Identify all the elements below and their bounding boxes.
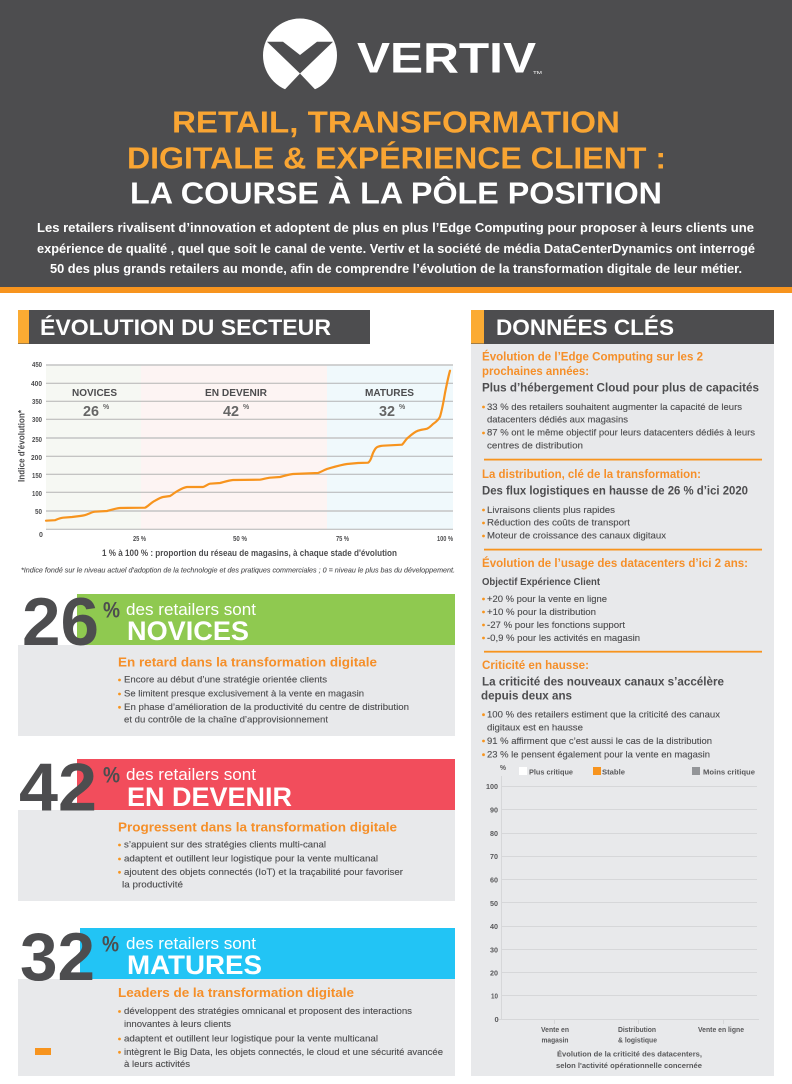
bullet list	[118, 675, 409, 724]
y axis labels: 90	[490, 806, 498, 814]
intro text: expérience de qualité , quel que soit le canal de vente. Vertiv et la société de média DataCenterDynamics ont interrogé	[37, 241, 755, 256]
bullet list	[118, 840, 403, 889]
block: usage des datacenters	[482, 555, 748, 643]
y axis labels: 70	[490, 852, 498, 861]
heading: données clés: DONNÉES CLÉS	[496, 315, 674, 340]
stage label: novices	[72, 387, 117, 420]
y axis labels: 0	[494, 1015, 499, 1024]
x axis labels: 50 %	[233, 536, 248, 543]
block: edge computing: prochaines années:	[482, 364, 589, 378]
x axis labels: 75 %	[336, 536, 350, 543]
block: criticité	[481, 658, 724, 760]
band text: des retailers sont	[126, 600, 256, 619]
block: criticité: 23 % le pensent également pour la vente en magasin	[487, 750, 710, 760]
x axis labels: & logistique	[618, 1036, 657, 1045]
band text	[126, 934, 262, 980]
y axis labels: 50	[35, 509, 42, 516]
y axis labels: 150	[32, 473, 42, 480]
block: edge computing: 33 % des retailers souhaitent augmenter la capacité de leurs	[487, 402, 742, 412]
bullet list: En phase d’amélioration de la productivité du centre de distribution	[124, 702, 409, 712]
block: distribution: Des flux logistiques en hausse de 26 % d’ici 2020	[482, 484, 748, 498]
block: usage des datacenters: +10 % pour la distribution	[487, 607, 596, 617]
block: criticité: Criticité en hausse:	[482, 658, 589, 672]
line chart: indice d'évolution	[16, 362, 454, 559]
panel: 42 % en devenir	[18, 750, 455, 901]
band text	[126, 600, 256, 646]
chart caption	[556, 1050, 702, 1070]
percent sign: %	[103, 763, 120, 788]
evolution curve	[46, 371, 450, 521]
y axis labels: 80	[490, 829, 498, 838]
block: distribution: Moteur de croissance des canaux digitaux	[487, 531, 666, 541]
block: criticité: 100 % des retailers estiment que la criticité des canaux	[487, 710, 720, 720]
x axis labels: Distribution	[618, 1025, 656, 1034]
x axis labels	[133, 536, 454, 543]
band text: EN DEVENIR	[127, 782, 292, 812]
title: LA COURSE À LA PÔLE POSITION	[130, 174, 662, 210]
y axis title: Indice d'évolution*	[16, 410, 26, 482]
legend: %	[500, 763, 506, 772]
bullet list: adaptent et outillent leur logistique pour la vente multicanal	[124, 1034, 378, 1044]
intro text: 50 des plus grands retailers au monde, afin de comprendre l’évolution de la transformation digitale de leur métier.	[50, 261, 742, 276]
bullet list: ajoutent des objets connectés (IoT) et la traçabilité pour favoriser	[124, 867, 403, 877]
panel: 32 % matures	[18, 919, 455, 1076]
stage label: matures	[365, 387, 414, 420]
block: edge computing: Plus d’hébergement Cloud pour plus de capacités	[482, 381, 759, 395]
block: edge computing: datacenters dédiés aux magasins	[487, 415, 628, 425]
bullet list: intègrent le Big Data, les objets connectés, le cloud et une sécurité avancée	[124, 1047, 443, 1057]
x axis caption: 1 % à 100 % : proportion du réseau de magasins, à chaque stade d'évolution	[102, 548, 397, 559]
title: RETAIL, TRANSFORMATION	[172, 106, 620, 140]
block: edge computing: 87 % ont le même objectif pour leurs datacenters dédiés à leurs	[487, 428, 755, 438]
title: DIGITALE & EXPÉRIENCE CLIENT :	[127, 140, 666, 175]
panel: données clés	[471, 310, 774, 1076]
stage label: matures: %	[399, 404, 406, 411]
band text: MATURES	[127, 950, 262, 980]
percent sign: %	[103, 598, 120, 623]
y axis labels: 450	[32, 362, 42, 369]
bullet list: à leurs activités	[124, 1059, 190, 1069]
y axis labels: 10	[491, 992, 498, 1000]
stage label: en devenir	[205, 387, 267, 420]
y axis labels: 50	[490, 899, 498, 908]
intro text	[37, 220, 755, 276]
block: distribution: La distribution, clé de la transformation:	[482, 467, 701, 481]
y axis labels: 400	[31, 381, 42, 388]
y axis labels: 350	[32, 399, 42, 406]
stage label: novices: %	[103, 404, 110, 411]
small orange marker	[35, 1048, 51, 1055]
x axis labels: 100 %	[437, 536, 454, 543]
stage label: en devenir: 42	[223, 403, 239, 420]
block: edge computing: centres de distribution	[487, 441, 583, 451]
intro text: Les retailers rivalisent d’innovation et adoptent de plus en plus l’Edge Computing pour proposer à leurs clients une	[37, 220, 754, 235]
legend: Plus critique	[529, 768, 573, 777]
percent sign: %	[102, 932, 119, 957]
block: usage des datacenters: Objectif Expérience Client	[482, 576, 600, 588]
bullet list: s’appuient sur des stratégies clients multi-canal	[124, 840, 326, 850]
bullet list: adaptent et outillent leur logistique pour la vente multicanal	[124, 854, 378, 864]
stage label: novices: 26	[83, 403, 99, 420]
block: criticité: 91 % affirment que c’est aussi le cas de la distribution	[487, 736, 712, 746]
y axis labels: 300	[32, 417, 42, 424]
logo: Vertiv: TM	[533, 70, 542, 75]
stage label: matures: 32	[379, 403, 395, 420]
big number 42: 42	[19, 750, 97, 826]
block: distribution	[482, 467, 748, 541]
block: distribution: Réduction des coûts de transport	[487, 518, 630, 528]
y axis labels: 60	[490, 876, 498, 884]
y axis labels: 100	[486, 782, 498, 791]
band text	[126, 765, 292, 812]
stage label: en devenir: EN DEVENIR	[205, 387, 267, 399]
block: usage des datacenters: +20 % pour la vente en ligne	[487, 594, 607, 604]
heading: évolution du secteur: ÉVOLUTION DU SECTEUR	[40, 315, 331, 340]
band text: des retailers sont	[126, 765, 256, 784]
y axis labels: 250	[32, 437, 42, 444]
subheading: Leaders de la transformation digitale	[118, 985, 354, 1000]
logo: Vertiv: VERTIV	[357, 35, 536, 83]
x axis labels: Vente en ligne	[698, 1025, 744, 1034]
bullet list: et du contrôle de la chaîne d’approvisionnement	[124, 714, 328, 724]
bullet list	[118, 1006, 443, 1069]
bullet list: la productivité	[122, 879, 183, 889]
block: criticité: digitaux est en hausse	[487, 723, 583, 733]
band text: des retailers sont	[126, 934, 256, 953]
y axis labels: 200	[31, 455, 42, 462]
legend: Stable	[602, 768, 625, 777]
block: usage des datacenters: -27 % pour les fonctions support	[487, 620, 625, 630]
footnote: *Indice fondé sur le niveau actuel d'adoption de la technologie et des pratiques commerciales ; 0 = niveau le plus bas du développement.	[21, 566, 455, 575]
bullet list: Encore au début d’une stratégie orientée clients	[124, 675, 327, 685]
heading: évolution du secteur	[18, 310, 370, 344]
legend: Moins critique	[703, 768, 755, 777]
block: criticité: La criticité des nouveaux canaux s’accélère	[482, 675, 724, 689]
big number 32: 32	[20, 919, 95, 995]
stage label: matures: MATURES	[365, 387, 414, 399]
block: criticité: depuis deux ans	[481, 689, 572, 703]
header banner	[0, 0, 792, 293]
bullet list: innovantes à leurs clients	[124, 1019, 231, 1029]
x axis labels: magasin	[542, 1036, 569, 1045]
stage label: novices: NOVICES	[72, 387, 117, 399]
block: edge computing	[482, 349, 759, 451]
subheading: En retard dans la transformation digitale	[118, 655, 377, 670]
x axis labels: Vente en	[541, 1025, 569, 1034]
y axis labels	[31, 362, 43, 539]
chart: criticité des datacenters	[486, 776, 759, 1070]
band text: NOVICES	[127, 616, 249, 646]
title	[127, 106, 666, 210]
logo: Vertiv	[263, 18, 542, 94]
x axis labels: 25 %	[133, 536, 147, 543]
subheading: Progressent dans la transformation digitale	[118, 820, 397, 835]
y axis labels: 30	[490, 946, 498, 954]
bullet list: développent des stratégies omnicanal et proposent des interactions	[124, 1006, 412, 1016]
block: edge computing: Évolution de l’Edge Computing sur les 2	[482, 349, 703, 364]
block: usage des datacenters: -0,9 % pour les activités en magasin	[487, 633, 640, 643]
y axis labels: 0	[39, 532, 43, 539]
big number 26: 26	[22, 584, 99, 660]
chart caption: Évolution de la criticité des datacenters,	[557, 1050, 702, 1059]
chart caption: selon l'activité opérationnelle concernée	[556, 1061, 702, 1070]
block: usage des datacenters: Évolution de l’usage des datacenters d’ici 2 ans:	[482, 555, 748, 570]
y axis labels	[486, 782, 499, 1024]
legend	[500, 763, 755, 777]
y axis labels: 40	[490, 922, 498, 931]
y axis labels: 20	[490, 968, 498, 978]
stage label: en devenir: %	[243, 404, 250, 411]
y axis labels: 100	[32, 491, 42, 498]
heading: données clés	[471, 310, 774, 344]
block: distribution: Livraisons clients plus rapides	[487, 505, 615, 515]
panel: 26 % novices	[18, 584, 455, 736]
x axis labels	[541, 1025, 744, 1045]
bullet list: Se limitent presque exclusivement à la vente en magasin	[124, 689, 364, 699]
